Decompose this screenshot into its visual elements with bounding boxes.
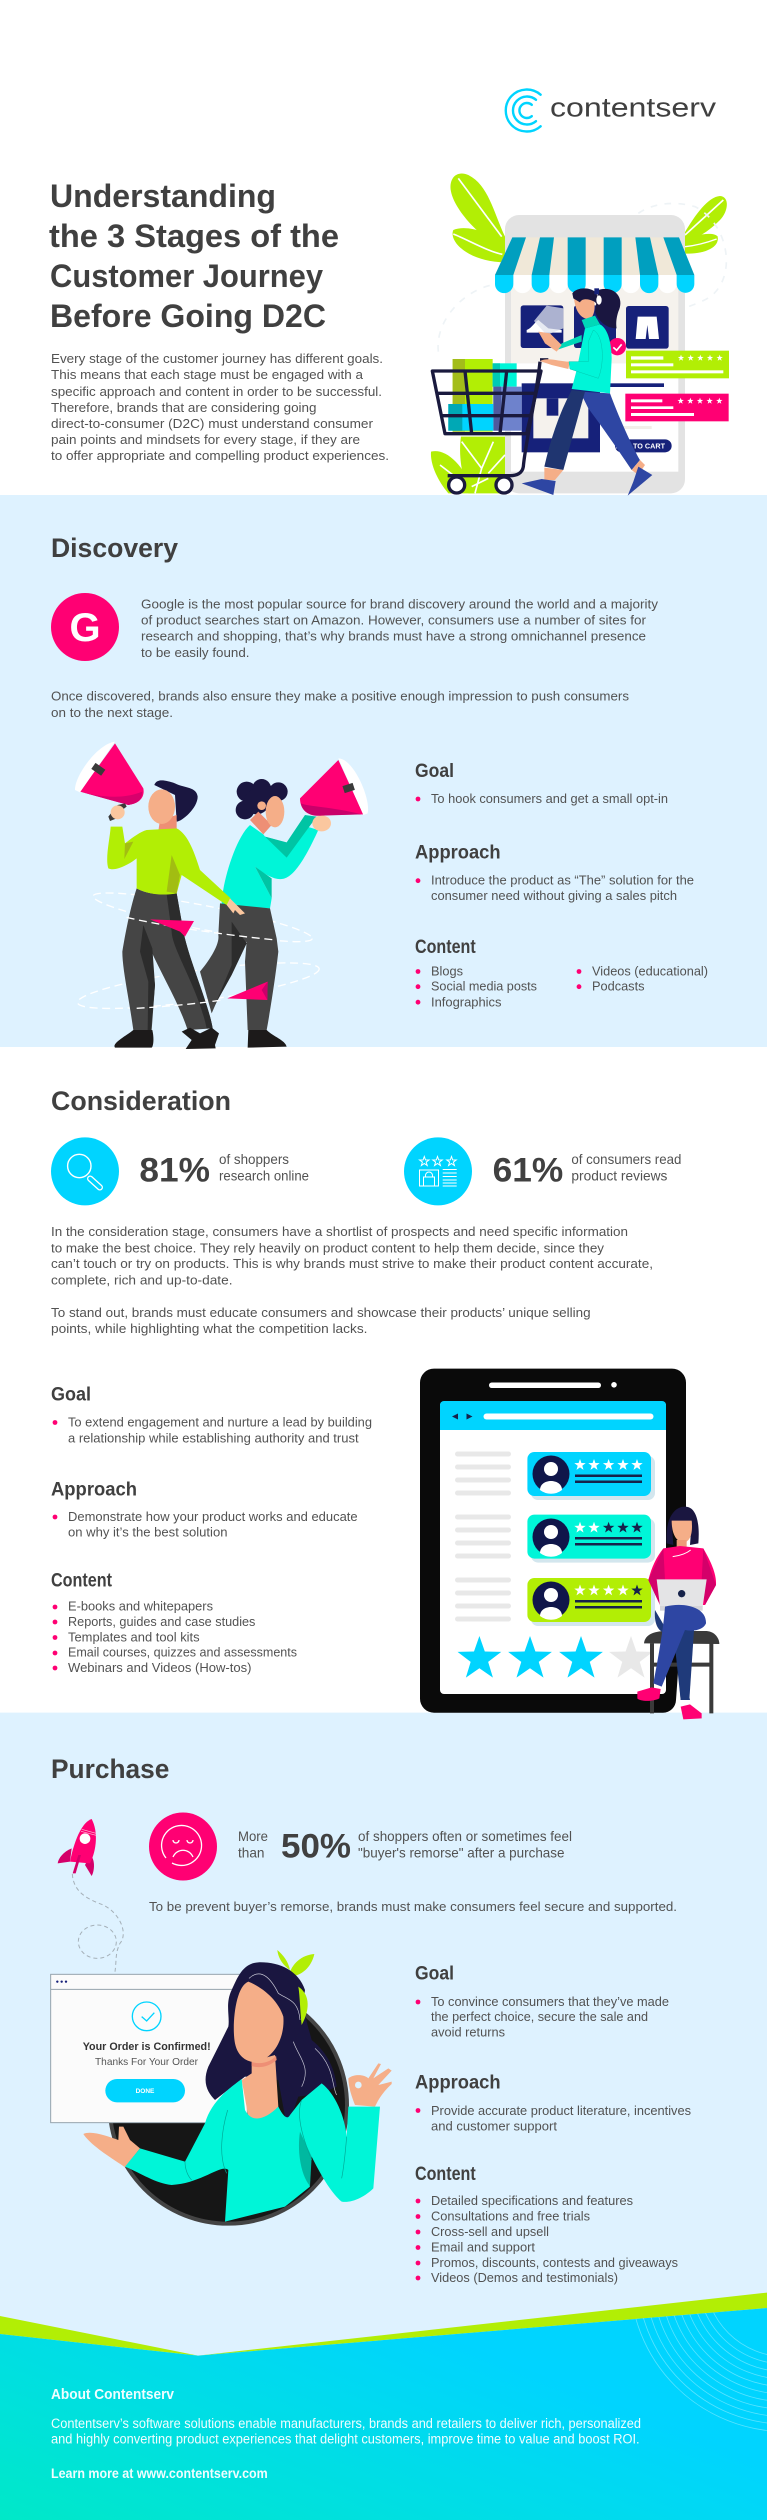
heading: Purchase: Purchase bbox=[51, 1754, 169, 1784]
text block: goal: Goal bbox=[415, 1964, 454, 1985]
heading: Consideration: Consideration bbox=[51, 1086, 231, 1116]
text: stand out paragraph: To stand out, brands must educate consumers and showcase their products’ unique selling bbox=[51, 1305, 591, 1320]
text: consideration paragraph: to make the best choice. They rely heavily on product content to help them decide, since they bbox=[51, 1240, 605, 1255]
illustration: woman with order confirmation window: DONE bbox=[136, 2088, 155, 2095]
text block: goal: To extend engagement and nurture a lead by building bbox=[68, 1415, 372, 1430]
illustration: rocket with dashed trail bbox=[58, 1819, 123, 1972]
panel: discovery bbox=[0, 495, 767, 1049]
stat: 81%: research online bbox=[219, 1168, 309, 1184]
text: Google paragraph: to be easily found. bbox=[141, 645, 250, 660]
text: intro paragraph: Every stage of the customer journey has different goals. bbox=[51, 351, 383, 366]
text block: approach: consumer need without giving a sales pitch bbox=[431, 888, 677, 903]
illustration: woman with order confirmation window bbox=[51, 1950, 392, 2224]
text: stand out paragraph bbox=[51, 1305, 591, 1336]
illustration: shopper at storefront bbox=[431, 174, 729, 496]
illustration: shopper at storefront: ADD TO CART bbox=[615, 441, 666, 450]
text block: approach: Provide accurate product literature, incentives bbox=[431, 2103, 691, 2118]
footer heading: About Contentserv bbox=[51, 2386, 175, 2403]
text block: content bbox=[415, 937, 708, 1009]
text: prevent remorse: To be prevent buyer’s remorse, brands must make consumers feel secure and supported. bbox=[149, 1899, 677, 1914]
text: Google paragraph: research and shopping, that’s why brands must have a strong omnichannel presence bbox=[141, 629, 646, 644]
text: consideration paragraph: In the consideration stage, consumers have a shortlist of prospects and need specific information bbox=[51, 1224, 628, 1239]
footer text: Contentserv’s software solutions enable manufacturers, brands and retailers to deliver rich, personalized bbox=[51, 2416, 641, 2431]
text block: content bbox=[51, 1571, 297, 1675]
text: once discovered paragraph: Once discovered, brands also ensure they make a positive enough impression to push consumers bbox=[51, 689, 630, 704]
logo: contentserv: contentserv bbox=[550, 93, 717, 123]
text block: content: Infographics bbox=[431, 994, 502, 1009]
stat: 81% bbox=[139, 1151, 309, 1190]
text: once discovered paragraph: on to the next stage. bbox=[51, 705, 173, 720]
title: the 3 Stages of the bbox=[49, 218, 339, 254]
text: consideration paragraph bbox=[51, 1224, 653, 1287]
stat: 50% of shoppers: "buyer's remorse" after a purchase bbox=[358, 1845, 565, 1861]
text block: goal bbox=[415, 1964, 669, 2039]
text block: content: Blogs bbox=[431, 964, 463, 979]
text block: content: Videos (Demos and testimonials) bbox=[431, 2270, 618, 2285]
text: intro paragraph bbox=[51, 351, 389, 463]
text: consideration paragraph: can’t touch or try on products. This is why brands must strive to make their product content accurate, bbox=[51, 1256, 653, 1271]
text block: approach: and customer support bbox=[431, 2118, 557, 2134]
text block: approach: on why it’s the best solution bbox=[68, 1524, 228, 1540]
text block: goal bbox=[415, 761, 668, 806]
text block: content: Content bbox=[415, 2164, 476, 2185]
text block: goal: To convince consumers that they’ve made bbox=[431, 1994, 669, 2009]
panel: purchase bbox=[0, 1713, 767, 2363]
icon: product reviews bbox=[404, 1137, 472, 1205]
text block: approach bbox=[415, 843, 694, 903]
text block: approach: Introduce the product as “The” solution for the bbox=[431, 873, 694, 888]
text block: content: Detailed specifications and features bbox=[431, 2193, 633, 2208]
review card 3 bbox=[527, 1578, 655, 1626]
text: intro paragraph: This means that each stage must be engaged with a bbox=[51, 367, 364, 382]
text: intro paragraph: Therefore, brands that are considering going bbox=[51, 400, 316, 415]
title: Customer Journey bbox=[50, 258, 323, 294]
illustration: two people with megaphones bbox=[75, 742, 368, 1049]
text block: goal: a relationship while establishing authority and trust bbox=[68, 1430, 359, 1445]
text block: goal: Goal bbox=[51, 1385, 91, 1406]
text block: goal: the perfect choice, secure the sale and bbox=[431, 2009, 648, 2024]
illustration: tablet with reviews bbox=[420, 1369, 686, 1713]
text block: content: Webinars and Videos (How-tos) bbox=[68, 1660, 252, 1675]
text block: content: Consultations and free trials bbox=[431, 2208, 590, 2223]
text: Google paragraph: of product searches start on Amazon. However, consumers use a number of sites for bbox=[141, 613, 647, 628]
text block: approach: Approach bbox=[415, 843, 501, 864]
illustration: woman sitting with laptop bbox=[637, 1507, 719, 1719]
text: intro paragraph: direct-to-consumer (D2C) must understand consumer bbox=[51, 416, 374, 431]
title: Understanding bbox=[50, 178, 276, 214]
text block: content: E-books and whitepapers bbox=[68, 1599, 213, 1614]
text: stand out paragraph: points, while highlighting what the competition lacks. bbox=[51, 1321, 368, 1336]
text block: content bbox=[415, 2164, 678, 2285]
illustration: woman with order confirmation window: Your Order is Confirmed! bbox=[83, 2041, 211, 2053]
panel: consideration bbox=[51, 1086, 719, 1719]
text: once discovered paragraph bbox=[51, 689, 630, 720]
accent stripe bbox=[0, 2293, 767, 2356]
stat: 61%: 61% bbox=[493, 1152, 563, 1190]
stat: 81%: 81% bbox=[139, 1152, 210, 1190]
review card 2 bbox=[527, 1515, 655, 1563]
footer text bbox=[51, 2416, 641, 2446]
stat: 61%: of consumers read bbox=[571, 1151, 681, 1167]
text block: goal: Goal bbox=[415, 761, 454, 782]
text block: content: Email courses, quizzes and assessments bbox=[68, 1644, 297, 1660]
text: intro paragraph: to offer appropriate and compelling product experiences. bbox=[51, 448, 389, 463]
icon: sad face bbox=[149, 1812, 217, 1880]
text: consideration paragraph: complete, rich and up-to-date. bbox=[51, 1272, 232, 1287]
stat: 50% of shoppers: More bbox=[238, 1828, 268, 1844]
heading: Discovery: Discovery bbox=[51, 533, 178, 563]
footer text: and highly converting product experiences that delight customers, improve time to value and boost ROI. bbox=[51, 2432, 640, 2446]
review card 1 bbox=[527, 1452, 655, 1500]
text block: approach: Approach bbox=[415, 2073, 501, 2094]
stat: 81%: of shoppers bbox=[219, 1151, 289, 1167]
title bbox=[49, 178, 339, 334]
text block: goal: avoid returns bbox=[431, 2024, 505, 2039]
text block: content: Email and support bbox=[431, 2239, 535, 2254]
text block: approach: Approach bbox=[51, 1479, 137, 1500]
text block: goal: To hook consumers and get a small opt-in bbox=[431, 791, 668, 806]
stat: 50% of shoppers: 50% bbox=[281, 1828, 351, 1866]
text block: approach: Demonstrate how your product works and educate bbox=[68, 1509, 358, 1524]
text: intro paragraph: pain points and mindsets for every stage, if they are bbox=[51, 432, 360, 447]
panel: intro header bbox=[49, 90, 729, 496]
text block: goal bbox=[51, 1385, 372, 1445]
icon: magnifier bbox=[51, 1137, 119, 1205]
footer link: Learn more at www.contentserv.com bbox=[51, 2466, 268, 2481]
text block: content: Promos, discounts, contests and giveaways bbox=[431, 2255, 678, 2270]
logo: contentserv bbox=[506, 90, 717, 132]
big rating stars bbox=[458, 1636, 653, 1678]
stat: 61%: product reviews bbox=[571, 1168, 667, 1184]
text block: content: Templates and tool kits bbox=[68, 1629, 200, 1644]
text block: approach bbox=[415, 2073, 691, 2134]
text block: content: Videos (educational) bbox=[592, 964, 708, 979]
text block: approach bbox=[51, 1479, 358, 1540]
stat: 50% of shoppers bbox=[238, 1828, 572, 1866]
text block: content: Social media posts bbox=[431, 979, 537, 994]
title: Before Going D2C bbox=[50, 298, 326, 334]
footer background bbox=[0, 2308, 767, 2520]
icon: Google G: G bbox=[69, 606, 101, 650]
illustration: woman with order confirmation window: Thanks For Your Order bbox=[95, 2056, 198, 2068]
icon: Google G bbox=[51, 593, 119, 661]
text block: content: Reports, guides and case studies bbox=[68, 1614, 256, 1629]
text block: content: Content bbox=[51, 1571, 113, 1592]
text: Google paragraph: Google is the most popular source for brand discovery around the world and a majority bbox=[141, 597, 659, 612]
stat: 50% of shoppers: than bbox=[238, 1845, 264, 1861]
panel: footer about contentserv bbox=[0, 2292, 767, 2520]
stat: 50% of shoppers: of shoppers often or sometimes feel bbox=[358, 1828, 572, 1844]
text block: content: Content bbox=[415, 937, 476, 958]
text block: content: Podcasts bbox=[592, 979, 645, 994]
text block: content: Cross-sell and upsell bbox=[431, 2224, 549, 2239]
text: intro paragraph: specific approach and content in order to be successful. bbox=[51, 384, 382, 399]
stat: 61% bbox=[493, 1151, 681, 1190]
text: Google paragraph bbox=[141, 597, 659, 660]
